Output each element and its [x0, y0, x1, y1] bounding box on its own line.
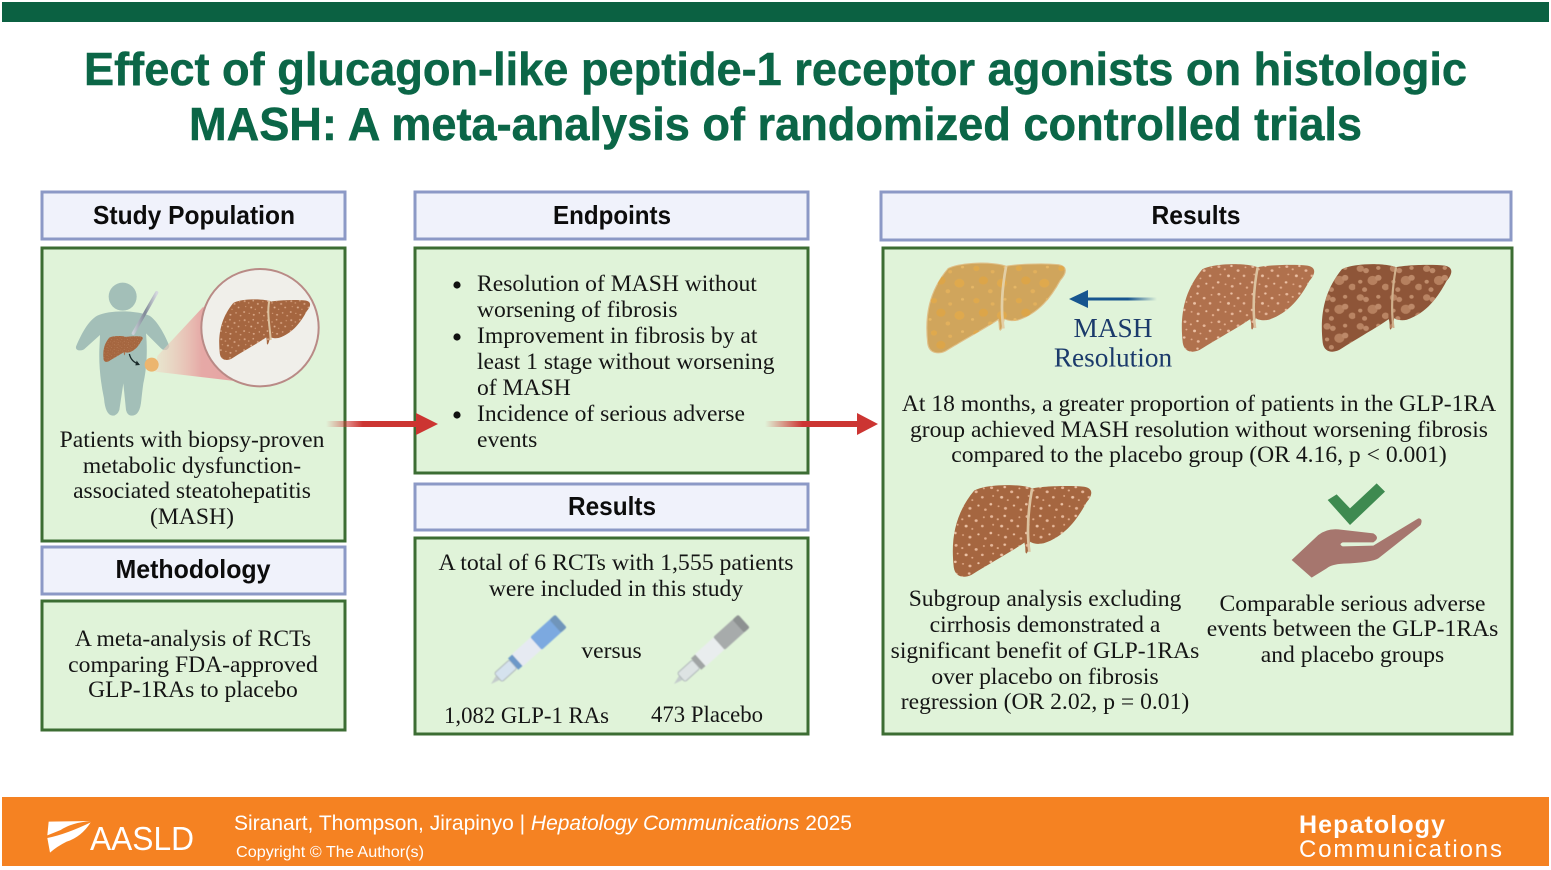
- icon: MASH liver: [1182, 264, 1314, 352]
- text: subgroup analysis: significant benefit of GLP-1RAs: [891, 638, 1199, 664]
- text: main finding: [902, 391, 1496, 468]
- arrow: population to endpoints: [326, 413, 438, 435]
- text: population description: (MASH): [150, 504, 234, 530]
- title: Effect of glucagon-like peptide-1 receptor agonists on histologic: [84, 43, 1467, 95]
- text: subgroup analysis: [891, 586, 1199, 715]
- panel: middle results: [415, 484, 808, 734]
- list: endpoints: Incidence of serious adverse: [477, 401, 745, 427]
- label: MASH resolution: MASH: [1074, 313, 1152, 343]
- text: safety finding: [1207, 591, 1498, 668]
- label: placebo count: 473 Placebo: [651, 702, 763, 728]
- logo: AASLD: [47, 820, 194, 857]
- icon: placebo pen: [668, 615, 750, 690]
- label: GLP-1 RA count: 1,082 GLP-1 RAs: [444, 703, 609, 729]
- text: subgroup analysis: regression (OR 2.02, p = 0.01): [901, 689, 1189, 715]
- text: included trials: [438, 550, 794, 602]
- text: methodology description: [68, 626, 318, 703]
- journal logo: Communications: [1299, 836, 1502, 863]
- panel: endpoints: [415, 192, 808, 473]
- journal logo: [1299, 811, 1502, 863]
- list: endpoints: [453, 271, 775, 453]
- label: versus: versus: [581, 638, 642, 664]
- text: safety finding: Comparable serious adverse: [1220, 591, 1486, 617]
- text: subgroup analysis: Subgroup analysis excluding: [909, 586, 1182, 612]
- text: population description: [60, 427, 325, 530]
- icon: hand with check mark: [1292, 483, 1422, 578]
- text: main finding: compared to the placebo group (OR 4.16, p < 0.001): [951, 442, 1447, 468]
- panel: main results: [881, 192, 1512, 734]
- text: population description: associated steatohepatitis: [73, 478, 311, 504]
- text: included trials: were included in this study: [489, 576, 743, 602]
- logo: AASLD: AASLD: [90, 820, 194, 857]
- list: endpoints: events: [477, 427, 537, 453]
- heading: endpoints: [415, 192, 808, 239]
- panel: methodology: [42, 547, 345, 730]
- heading: methodology: Methodology: [116, 554, 271, 584]
- text: subgroup analysis: cirrhosis demonstrated a: [930, 612, 1161, 638]
- copyright: Copyright © The Author(s): [236, 844, 424, 861]
- arrow: endpoints to results: [765, 413, 878, 435]
- list: endpoints: of MASH: [477, 375, 571, 401]
- list: endpoints: Improvement in fibrosis by at: [477, 323, 758, 349]
- text: methodology description: comparing FDA-approved: [68, 652, 318, 678]
- text: population description: metabolic dysfunction-: [83, 453, 301, 479]
- heading: results: Results: [568, 491, 656, 521]
- text: subgroup analysis: over placebo on fibrosis: [931, 664, 1159, 690]
- text: methodology description: GLP-1RAs to placebo: [88, 677, 298, 703]
- text: methodology description: A meta-analysis of RCTs: [75, 626, 311, 652]
- list: endpoints: least 1 stage without worsening: [477, 349, 775, 375]
- text: main finding: group achieved MASH resolution without worsening fibrosis: [910, 417, 1488, 443]
- arrow: MASH resolution: [1069, 290, 1157, 308]
- icon: patient with liver biopsy: [76, 269, 319, 416]
- top bar: [2, 2, 1549, 22]
- heading: study population: Study Population: [93, 200, 295, 230]
- citation: Siranart, Thompson, Jirapinyo | Hepatology Communications 2025: [234, 811, 852, 835]
- panel: study population: [42, 192, 345, 541]
- text: included trials: A total of 6 RCTs with 1,555 patients: [438, 550, 794, 576]
- title: MASH: A meta-analysis of randomized controlled trials: [189, 98, 1362, 150]
- text: safety finding: events between the GLP-1RAs: [1207, 616, 1498, 642]
- journal logo: Hepatology: [1299, 811, 1445, 839]
- icon: non-cirrhotic liver: [953, 485, 1091, 577]
- label: MASH resolution: [1054, 313, 1172, 372]
- icon: healthy liver after resolution: [927, 263, 1065, 353]
- heading: results: [415, 484, 808, 530]
- heading: results: Results: [1152, 200, 1240, 230]
- icon: GLP-1 RA pen: [485, 615, 567, 690]
- label: MASH resolution: Resolution: [1054, 342, 1172, 372]
- text: safety finding: and placebo groups: [1261, 642, 1444, 668]
- heading: endpoints: Endpoints: [553, 200, 671, 230]
- heading: results: [881, 192, 1511, 240]
- icon: cirrhotic liver: [1322, 264, 1451, 352]
- heading: study population: [42, 192, 345, 239]
- title: [84, 43, 1467, 150]
- list: endpoints: worsening of fibrosis: [477, 297, 678, 323]
- text: main finding: At 18 months, a greater proportion of patients in the GLP-1RA: [902, 391, 1496, 417]
- text: population description: Patients with biopsy-proven: [60, 427, 325, 453]
- heading: methodology: [42, 547, 345, 594]
- footer: [2, 797, 1549, 866]
- list: endpoints: Resolution of MASH without: [477, 271, 757, 297]
